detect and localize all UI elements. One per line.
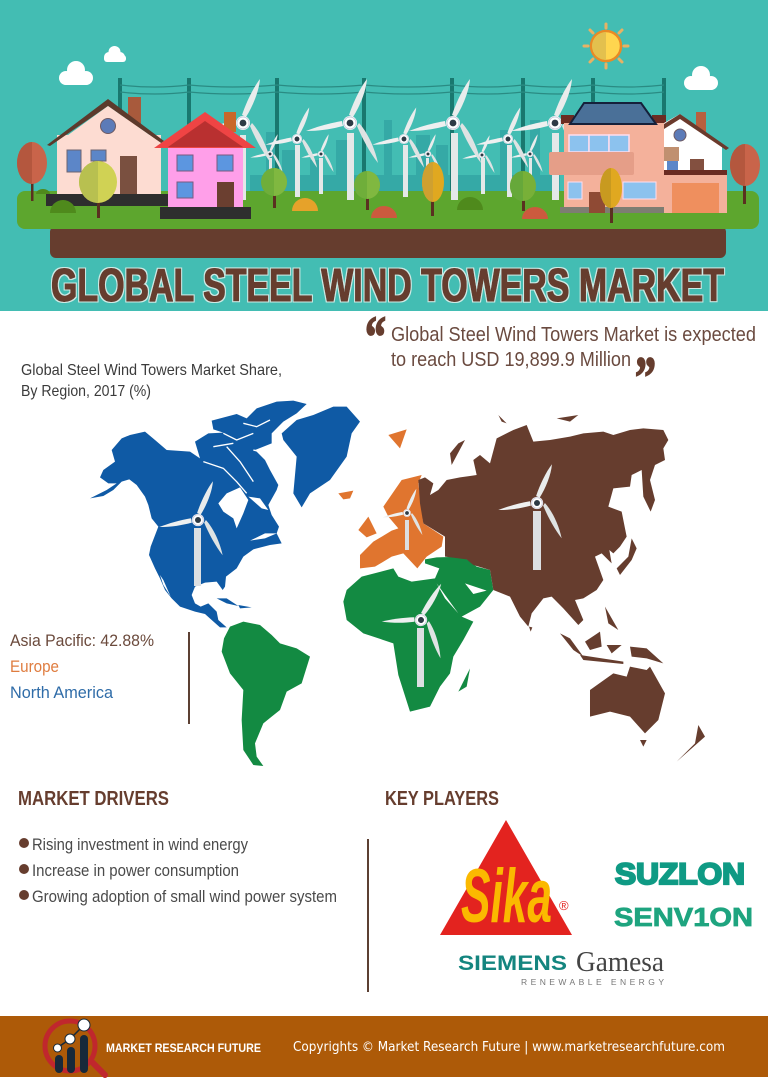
copyright: Copyrights © Market Research Future | www.marketresearchfuture.com — [293, 1040, 725, 1055]
logo: Suzlon: SUZLON — [615, 858, 745, 891]
world map — [90, 401, 705, 766]
logo: Siemens Gamesa: SIEMENS — [458, 952, 567, 975]
map region: Asia Pacific — [418, 415, 705, 762]
map region: South America — [222, 622, 310, 766]
section divider — [367, 839, 369, 992]
quote mark open: “ — [365, 304, 386, 369]
header banner background — [0, 0, 768, 311]
logo: Siemens Gamesa: RENEWABLE ENERGY — [521, 977, 664, 987]
list: market drivers: Rising investment in wind energy — [32, 835, 248, 854]
house: white with garage — [664, 112, 729, 213]
trees — [17, 142, 760, 223]
quote mark close: ” — [635, 345, 656, 410]
legend: Asia Pacific: 42.88% — [10, 631, 154, 650]
chart heading: Global Steel Wind Towers Market Share, — [21, 362, 282, 379]
logo: Sika: ® — [559, 898, 569, 913]
heading: market drivers: MARKET DRIVERS — [18, 788, 169, 810]
legend divider — [188, 632, 190, 724]
icon: map turbines — [159, 464, 562, 687]
legend: Europe — [10, 657, 59, 676]
illustration: wind farm scene — [17, 24, 760, 258]
house: cream — [46, 97, 168, 206]
list: market drivers: Increase in power consumption — [32, 861, 239, 880]
icon: clouds — [59, 46, 718, 90]
wind turbines — [199, 79, 583, 200]
power lines — [118, 78, 666, 198]
heading: key players: KEY PLAYERS — [385, 788, 499, 810]
ground: green lawn — [17, 191, 759, 229]
legend — [10, 631, 154, 702]
footer bar — [0, 1016, 768, 1077]
logo: Sika — [440, 820, 572, 939]
map region: North America — [90, 401, 360, 627]
chart heading — [21, 362, 282, 400]
house: solar roof — [549, 103, 668, 213]
list: market drivers: Growing adoption of small wind power system — [32, 887, 337, 906]
legend: North America — [10, 683, 114, 702]
brand name: MARKET RESEARCH FUTURE — [106, 1041, 261, 1055]
city skyline — [250, 120, 560, 195]
logo: Siemens Gamesa — [458, 947, 665, 987]
list: market drivers — [19, 835, 337, 906]
callout: market value quote — [365, 304, 756, 410]
logo: Market Research Future — [45, 1019, 105, 1075]
logo: Siemens Gamesa: Gamesa — [576, 947, 665, 978]
map region: Africa and Middle East — [343, 557, 493, 712]
logo: Sika: Sika — [461, 854, 552, 939]
bushes — [36, 189, 548, 219]
callout: market value quote: to reach USD 19,899.9 Million — [391, 349, 631, 371]
logo: Senvion: SENV1ON — [614, 902, 753, 932]
chart heading: By Region, 2017 (%) — [21, 383, 151, 400]
house: pink — [154, 112, 256, 219]
icon: sun — [584, 24, 628, 68]
map region: Europe — [338, 429, 443, 568]
ground: brown soil — [50, 226, 726, 258]
